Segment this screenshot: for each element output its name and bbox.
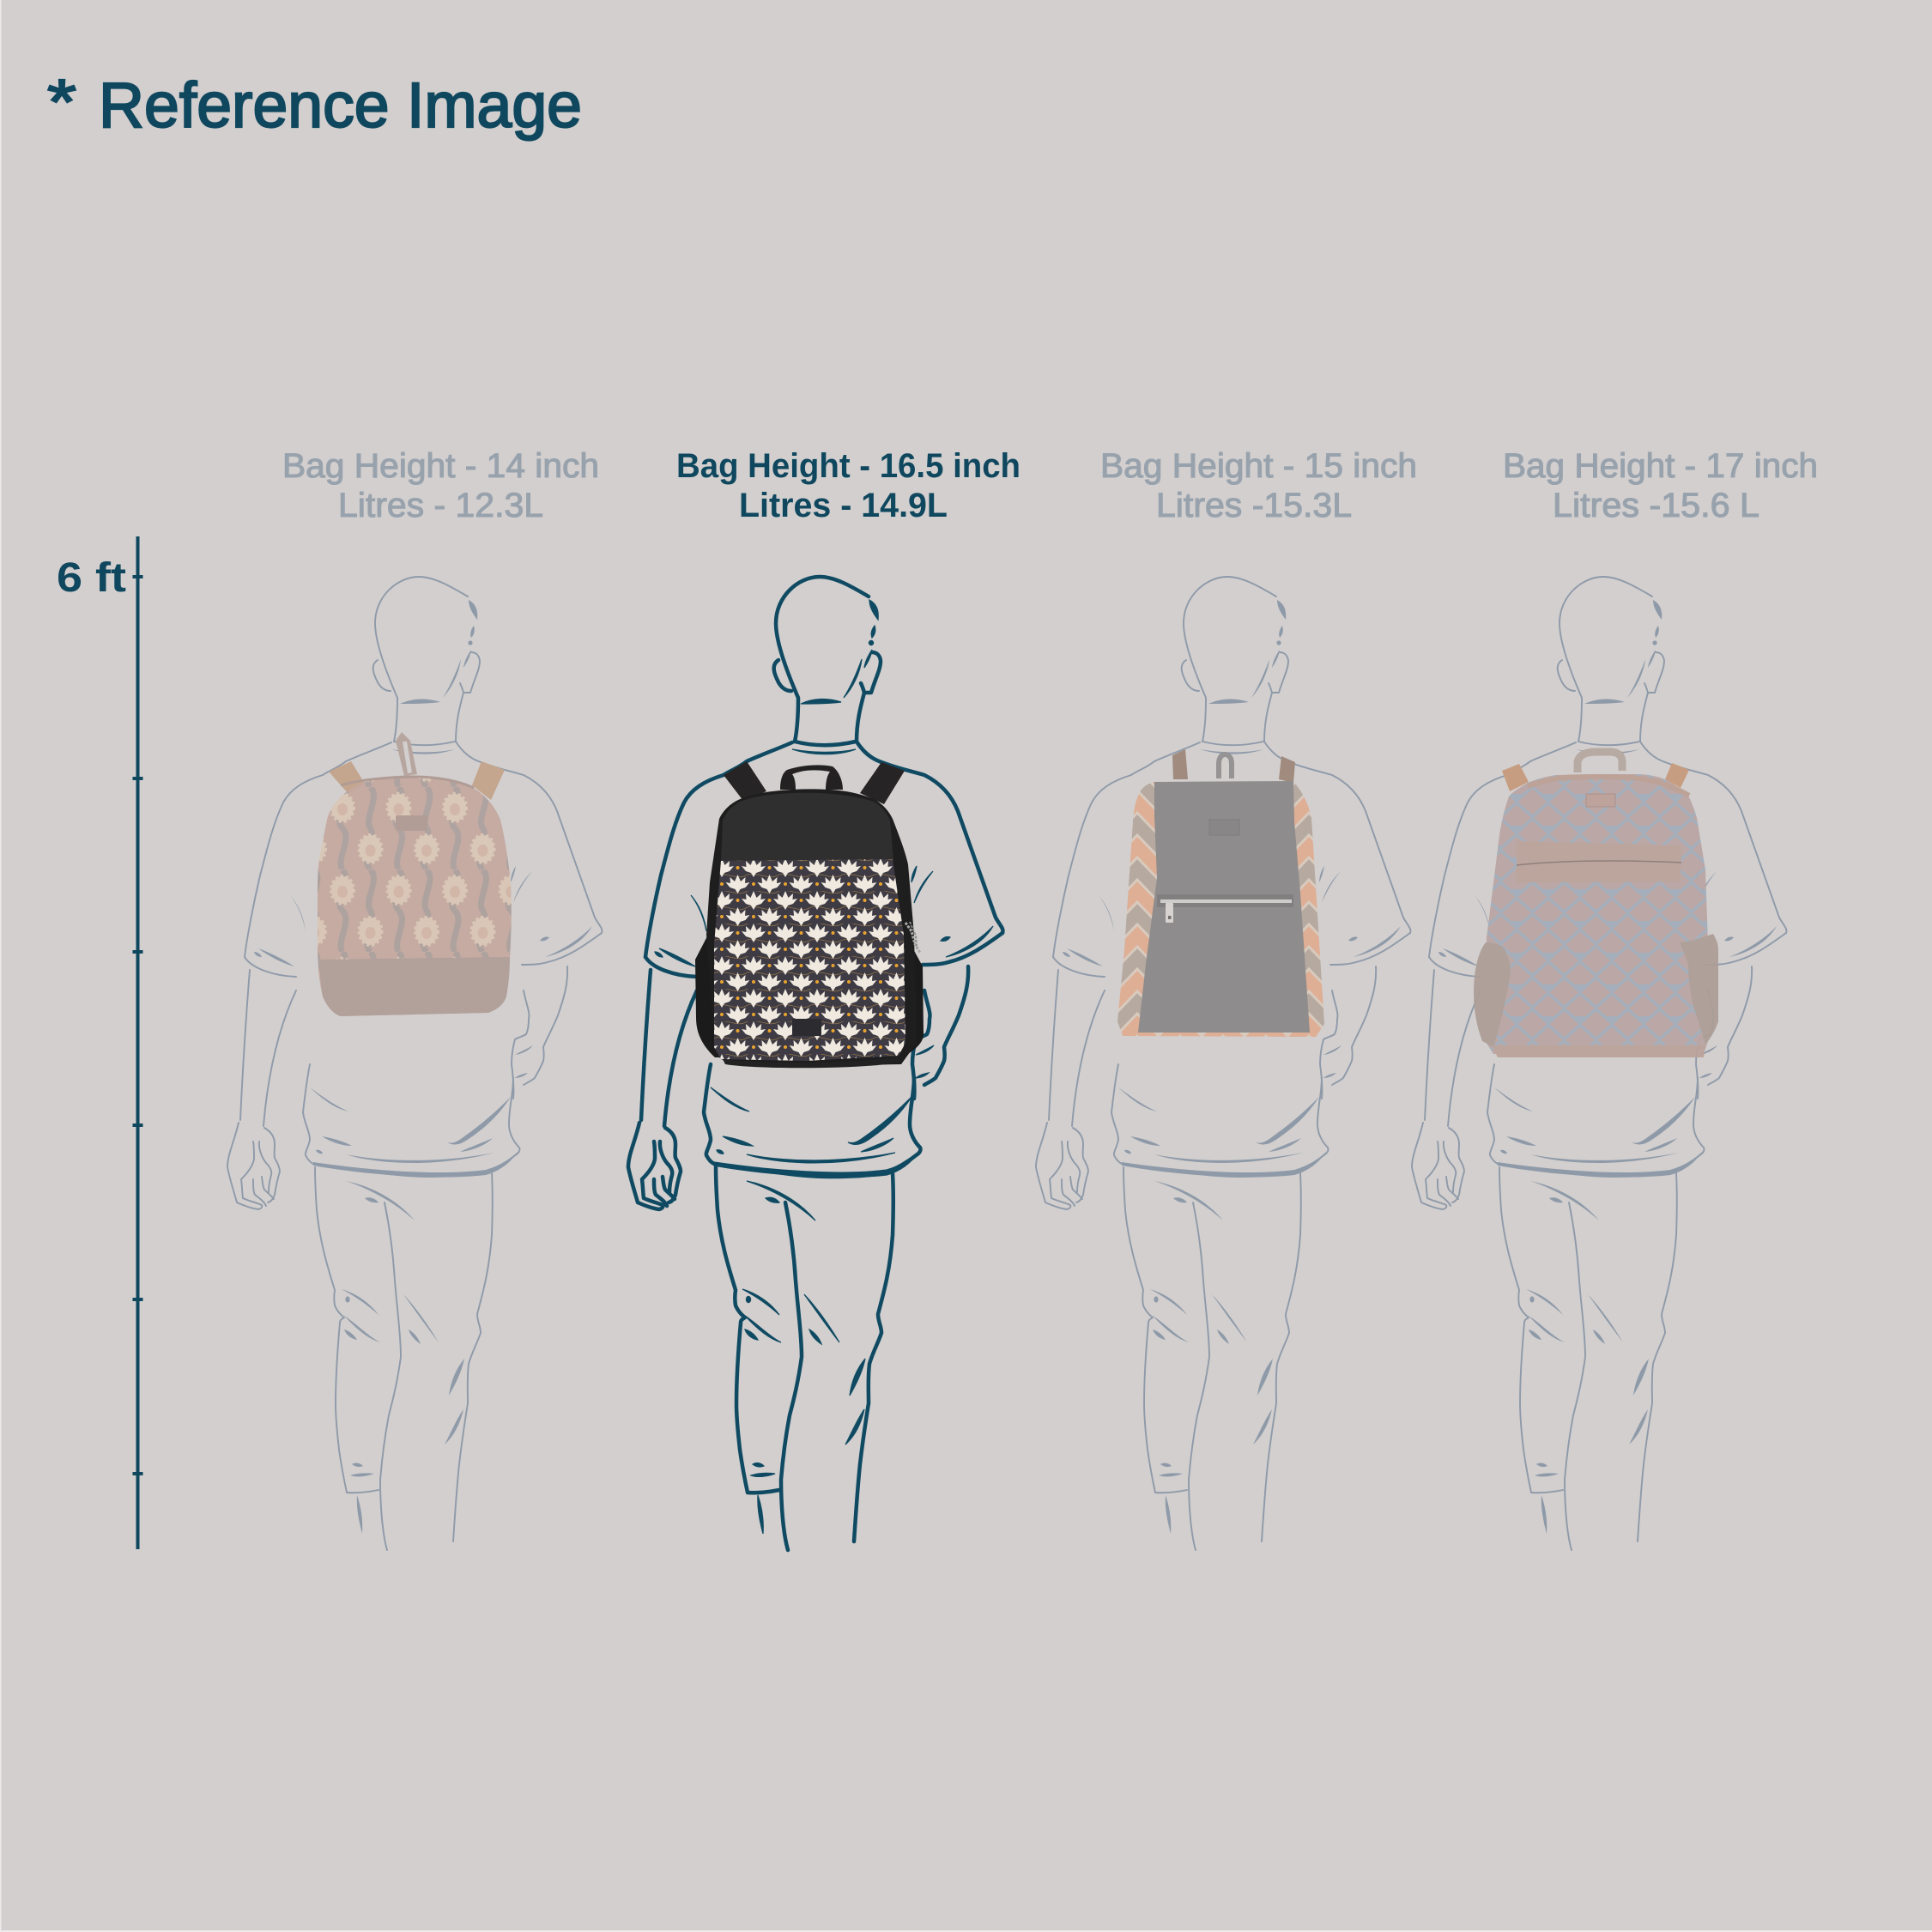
panel: 16.5 inch bag label: Litres - 14.9L <box>739 487 948 524</box>
panel: 16.5 inch bag label: Bag Height - 16.5 inch <box>676 447 1021 485</box>
zipper pull <box>905 923 920 953</box>
panel: 15 inch bag label: Bag Height - 15 inch <box>1100 447 1417 485</box>
body <box>706 789 917 1066</box>
backpack 2: black with lotus print <box>695 761 924 1068</box>
grey front panel <box>1138 781 1310 1033</box>
label: 6 ft: 6 ft <box>57 555 126 601</box>
logo patch <box>1209 820 1239 835</box>
zipper <box>1157 894 1293 907</box>
chevron fabric <box>1117 782 1324 1037</box>
title: * <box>47 66 76 137</box>
backpack 4: diamond pattern <box>1474 752 1718 1057</box>
lotus fabric <box>714 859 905 1061</box>
side pockets <box>695 935 721 1057</box>
panel: 14 inch bag label: Bag Height - 14 inch <box>282 447 599 485</box>
top trim <box>1528 777 1689 796</box>
panel: 14 inch bag label <box>282 447 599 524</box>
side pockets <box>1474 942 1511 1047</box>
panel: 17 inch bag label: Litres -15.6 L <box>1553 487 1759 524</box>
logo patch <box>792 1019 821 1036</box>
leather bands <box>1517 841 1681 882</box>
title: Reference Image <box>99 70 582 141</box>
figure 1: ghost man outline <box>227 577 602 1550</box>
leather top panel <box>721 793 893 862</box>
logo patch <box>396 815 427 831</box>
panel: 16.5 inch bag label <box>676 447 1021 524</box>
figure 4: ghost man outline <box>1412 577 1786 1550</box>
panel: 14 inch bag label: Litres - 12.3L <box>338 487 543 524</box>
figure 2: highlighted man outline <box>628 577 1002 1550</box>
height scale ruler <box>57 536 142 1549</box>
figure 3: ghost man outline <box>1036 577 1410 1550</box>
straps <box>724 761 905 804</box>
panel: 17 inch bag label: Bag Height - 17 inch <box>1503 447 1818 485</box>
panel: 17 inch bag label <box>1503 447 1818 524</box>
base <box>723 1057 899 1068</box>
handle <box>780 765 843 790</box>
panel: 15 inch bag label: Litres -15.3L <box>1156 487 1352 524</box>
backpack 1: pink damask <box>318 732 512 1016</box>
logo patch <box>1586 794 1615 807</box>
backpack 3: grey with chevron sides <box>1117 749 1324 1037</box>
panel: 15 inch bag label <box>1100 447 1417 524</box>
bottom strip <box>1492 1045 1705 1057</box>
body <box>1487 774 1708 1054</box>
